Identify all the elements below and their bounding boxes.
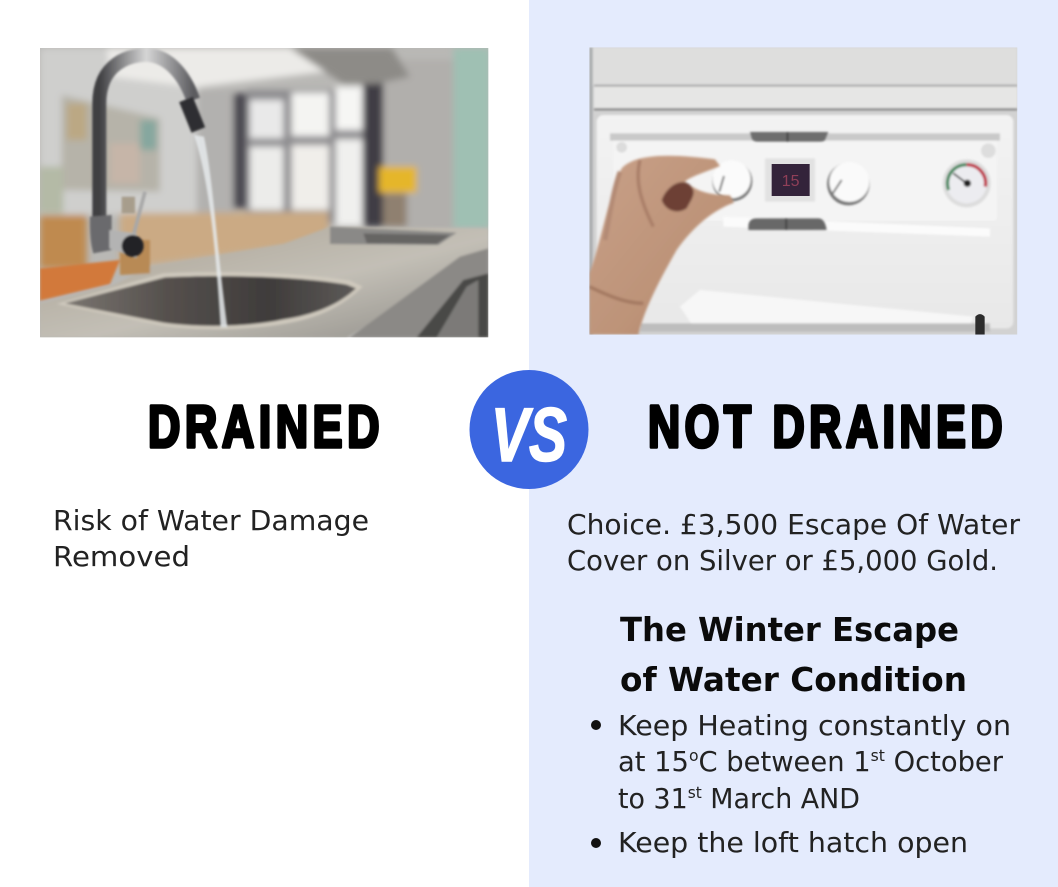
photo: running kitchen tap over sink — [40, 48, 490, 337]
heading: winter escape of water condition: The Winter Escape — [620, 610, 959, 649]
text: drained benefit — [53, 504, 369, 573]
bullet list: conditions: o — [689, 746, 699, 765]
badge: VS: VS — [491, 393, 567, 478]
bullet list: conditions: C between 1 — [699, 745, 871, 778]
bullet list: conditions: March AND — [702, 782, 860, 815]
photo: hand adjusting boiler dial — [589, 47, 1017, 335]
heading: winter escape of water condition: of Water Condition — [620, 660, 967, 699]
text: cover choice: Choice. £3,500 Escape Of Water — [567, 508, 1020, 541]
pressure gauge — [943, 159, 991, 207]
bullet list: conditions: st — [871, 746, 885, 765]
control buttons — [748, 132, 828, 230]
bullet list: conditions: st — [688, 783, 702, 802]
water stream — [194, 135, 227, 327]
dials — [712, 160, 870, 205]
drain pipe — [975, 314, 985, 335]
hand — [589, 156, 734, 335]
bullet list: conditions: Keep Heating constantly on — [618, 709, 1011, 742]
panel: not drained — [529, 0, 1058, 887]
bullet list: conditions: to 31 — [618, 782, 691, 815]
bullet list: conditions: Keep the loft hatch open — [618, 826, 968, 859]
display — [765, 158, 815, 202]
heading: winter escape of water condition — [620, 610, 967, 699]
text: drained benefit: Removed — [53, 540, 190, 573]
display: 15 — [782, 173, 800, 190]
text: cover choice: Cover on Silver or £5,000 Gold. — [567, 544, 998, 577]
heading: drained: DRAINED — [148, 394, 384, 460]
bullet list: conditions: October — [885, 745, 1003, 778]
text: drained benefit: Risk of Water Damage — [53, 504, 369, 537]
bullet list: conditions — [591, 709, 1011, 859]
bullet list: conditions: at 15 — [618, 745, 691, 778]
badge: VS — [470, 370, 588, 489]
text: cover choice — [567, 508, 1020, 577]
panel: drained — [40, 48, 488, 567]
faucet — [90, 55, 198, 258]
